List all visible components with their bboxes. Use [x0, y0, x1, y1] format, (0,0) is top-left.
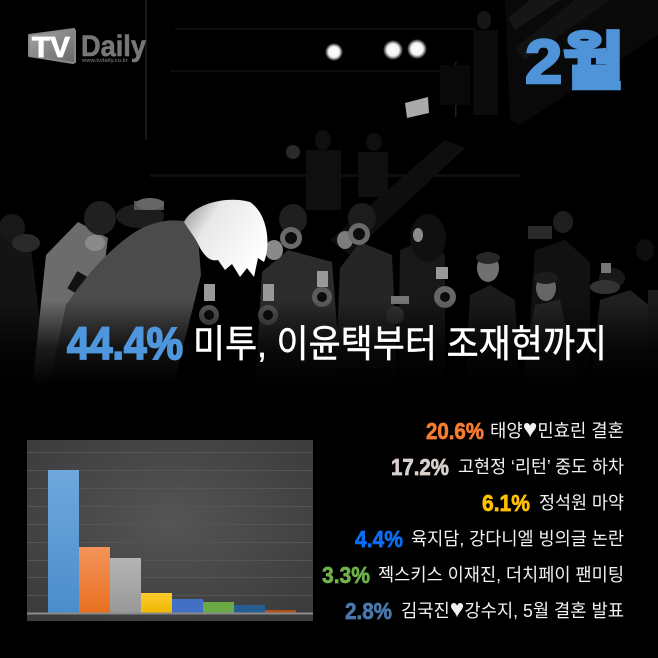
held paper sign [405, 97, 429, 118]
row 4.4% [355, 526, 624, 552]
headline [67, 318, 607, 369]
spectators on balcony [286, 130, 388, 210]
headline: 44.4% [67, 318, 183, 369]
month heading: 2월 [525, 28, 624, 97]
logo: TV Daily: Daily [81, 30, 146, 63]
row 6.1%: 6.1% [482, 490, 530, 516]
bowing man in coat [48, 220, 201, 390]
front row cameras [199, 263, 611, 325]
row 6.1% [482, 490, 624, 516]
row 3.3%: 젝스키스 이재진, 더치페이 팬미팅 [378, 565, 624, 585]
row 17.2%: 17.2% [391, 454, 449, 480]
row 17.2%: 고현정 ‘리턴’ 중도 하차 [458, 457, 624, 477]
row 20.6% [426, 415, 624, 444]
logo: TV Daily: TV [32, 32, 71, 64]
row 20.6%: 20.6% [426, 418, 484, 444]
row 3.3%: 3.3% [322, 562, 370, 588]
stage lights [325, 39, 427, 61]
ranking list [322, 415, 624, 624]
man's white hair [184, 200, 267, 277]
row 6.1%: 정석원 마약 [539, 493, 624, 513]
bottom fade [0, 300, 658, 395]
row 17.2% [391, 454, 624, 480]
row 2.8%: 2.8% [345, 598, 392, 624]
crowd of photographers [0, 198, 658, 390]
row 4.4%: 육지담, 강다니엘 빙의글 논란 [411, 529, 624, 549]
headline: 미투, 이윤택부터 조재현까지 [193, 324, 607, 366]
row 20.6%: 태양♥민효린 결혼 [490, 415, 624, 443]
bar chart [27, 440, 313, 621]
logo: TV Daily [29, 29, 146, 64]
logo: TV Daily: www.tvdaily.co.kr [81, 58, 128, 64]
row 2.8%: 김국진♥강수지, 5월 결혼 발표 [401, 595, 624, 623]
stage structure [145, 0, 658, 255]
bars [48, 470, 296, 613]
row 3.3% [322, 562, 624, 588]
photo: press conference [0, 0, 658, 395]
row 4.4%: 4.4% [355, 526, 403, 552]
